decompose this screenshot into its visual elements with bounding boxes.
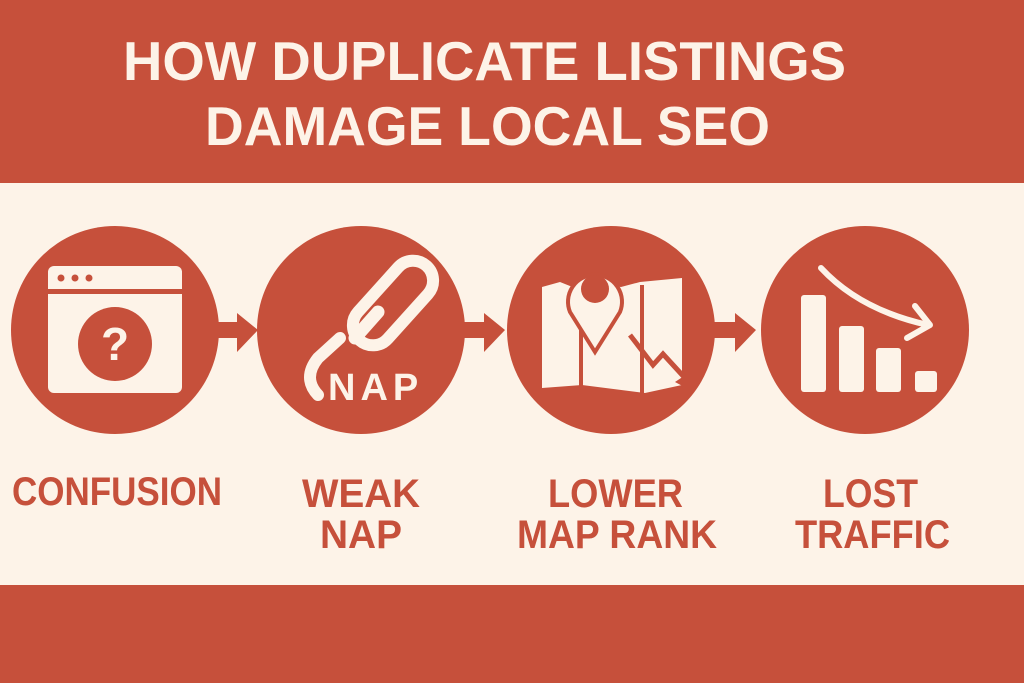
label: confusion: CONFUSION	[12, 470, 222, 514]
arrow 1	[216, 313, 258, 352]
step 2: weak NAP icon: NAP	[328, 367, 423, 409]
title	[123, 30, 846, 157]
step 2: weak NAP icon	[257, 226, 465, 434]
label: lost traffic	[795, 472, 950, 557]
step 4: lost traffic icon	[761, 226, 969, 434]
title: DAMAGE LOCAL SEO	[205, 95, 770, 157]
label: weak nap: WEAK	[302, 472, 420, 516]
step 1: confusion icon: ?	[101, 318, 129, 370]
footer band	[0, 585, 1024, 683]
step 1: confusion icon	[11, 226, 219, 434]
label: weak nap	[302, 472, 420, 557]
label: lower map rank: LOWER	[548, 472, 683, 516]
label: lower map rank	[517, 472, 717, 557]
arrow 3	[713, 313, 756, 352]
labels	[12, 470, 950, 557]
arrow 2	[463, 313, 505, 352]
label: lost traffic: LOST	[823, 472, 918, 516]
label: weak nap: NAP	[320, 513, 402, 557]
step 3: map rank icon	[507, 226, 715, 434]
header band	[0, 0, 1024, 183]
title: HOW DUPLICATE LISTINGS	[123, 30, 846, 92]
label: lower map rank: MAP RANK	[517, 513, 717, 557]
label: lost traffic: TRAFFIC	[795, 513, 950, 557]
